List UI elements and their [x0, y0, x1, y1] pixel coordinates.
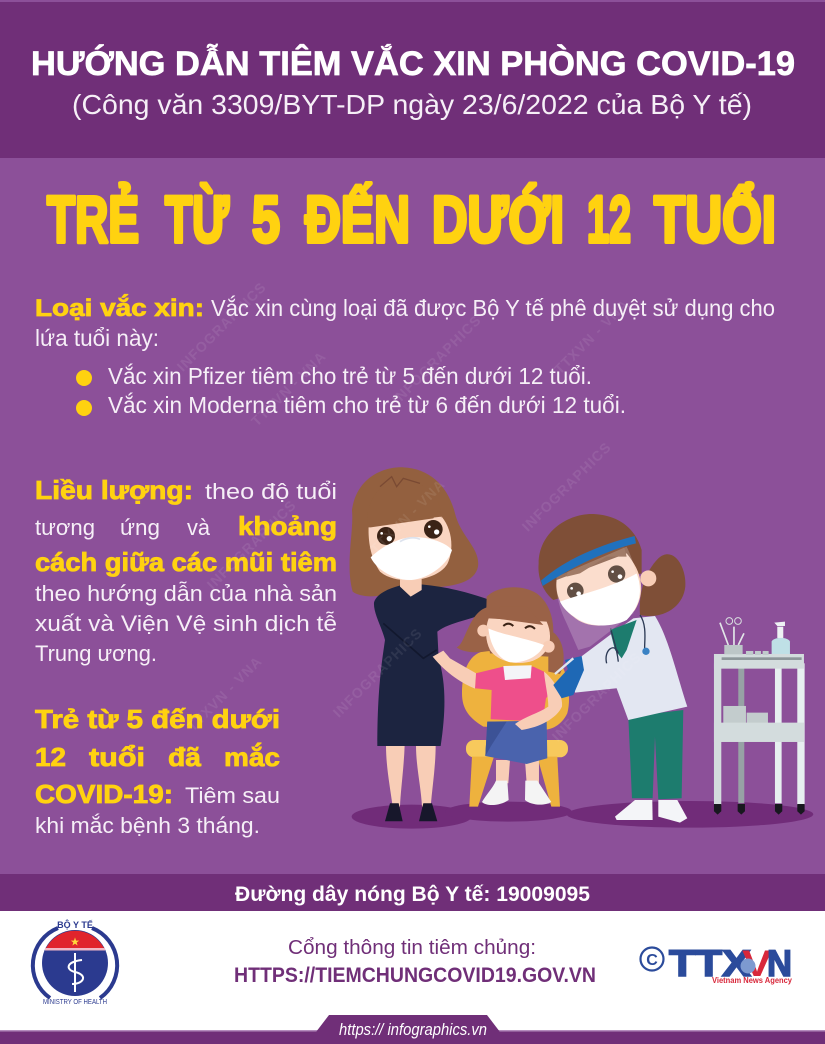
- text block: dosage: Liều lượng:: [35, 475, 193, 505]
- text block: vaccine type: Vắc xin cùng loại đã được Bộ Y tế phê duyệt sử dụng cho: [211, 295, 775, 321]
- text block: vaccine type: lứa tuổi này:: [35, 325, 159, 351]
- hotline band: [0, 874, 825, 911]
- text block: vaccine type: Loại vắc xin:: [35, 294, 204, 322]
- text block: dosage: theo độ tuổi: [205, 479, 337, 504]
- logo: Ministry of Health: ★: [70, 937, 80, 947]
- text block: dosage: và: [187, 515, 210, 540]
- white footer panel: [0, 911, 825, 1031]
- hotline band: Đường dây nóng Bộ Y tế: 19009095: [235, 883, 590, 906]
- header band: [0, 2, 825, 158]
- watermarks: TTXVN - VNA: [367, 476, 448, 557]
- text block: vaccine type: [35, 294, 775, 418]
- portal text: Cổng thông tin tiêm chủng:: [288, 937, 536, 959]
- text block: children who had COVID-19: tuổi: [89, 742, 145, 772]
- watermarks: INFOGRAPHICS: [389, 312, 484, 407]
- watermarks: INFOGRAPHICS: [549, 649, 644, 744]
- text block: dosage: xuất và Viện Vệ sinh dịch tễ: [35, 611, 337, 636]
- bullet: Moderna: Vắc xin Moderna tiêm cho trẻ từ 6 đến dưới 12 tuổi.: [108, 392, 626, 418]
- text block: dosage: tương: [35, 515, 95, 540]
- ground shadows: [352, 801, 813, 829]
- watermarks: INFOGRAPHICS: [204, 497, 299, 592]
- medical cart: [714, 618, 805, 815]
- main heading: age group: DƯỚI: [432, 182, 564, 256]
- logo: TTXVN: N: [767, 943, 792, 984]
- pigtails: [457, 607, 493, 652]
- watermarks: INFOGRAPHICS: [330, 625, 425, 720]
- main heading: age group: TRẺ: [47, 182, 139, 256]
- watermarks: TTXVN - VNA: [184, 653, 265, 734]
- text block: dosage: cách giữa các mũi tiêm: [35, 547, 337, 577]
- watermarks: [174, 279, 644, 744]
- logo: TTXVN: Vietnam News Agency: [712, 975, 792, 985]
- text block: dosage: khoảng: [238, 511, 337, 541]
- text block: children who had COVID-19: mắc: [224, 742, 280, 772]
- text block: children who had COVID-19: [35, 704, 280, 838]
- watermarks: TTXVN - VNA: [551, 296, 632, 377]
- watermarks: TTXVN - VNA: [248, 348, 329, 429]
- bottom band with url tab: https:// infographics.vn: [339, 1021, 487, 1039]
- text block: children who had COVID-19: COVID-19:: [35, 779, 173, 809]
- logo: TTXVN: V: [742, 943, 772, 984]
- portal text: [234, 937, 596, 987]
- main heading: age group: 12: [587, 182, 631, 256]
- logo: TTXVN: [640, 943, 792, 985]
- logo: Ministry of Health: BỘ Y TẾ: [57, 919, 93, 930]
- text block: dosage: Trung ương.: [35, 641, 157, 666]
- logo: Ministry of Health: [33, 919, 117, 1006]
- main heading: age group: TỪ: [165, 182, 229, 256]
- text block: children who had COVID-19: khi mắc bệnh 3 tháng.: [35, 813, 260, 838]
- face shield: [556, 547, 638, 650]
- girl: [433, 587, 564, 805]
- text block: dosage: [35, 475, 337, 666]
- subtitle: (Công văn 3309/BYT-DP ngày 23/6/2022 của Bộ Y tế): [72, 89, 752, 120]
- mother: [350, 467, 490, 821]
- bullet: Pfizer: Vắc xin Pfizer tiêm cho trẻ từ 5 đến dưới 12 tuổi.: [108, 363, 592, 389]
- text block: dosage: theo hướng dẫn của nhà sản: [35, 581, 337, 606]
- main heading: age group: 5: [252, 182, 280, 256]
- main heading: age group: TUỔI: [654, 182, 776, 256]
- portal text: HTTPS://TIEMCHUNGCOVID19.GOV.VN: [234, 964, 596, 987]
- text block: children who had COVID-19: Trẻ từ 5 đến dưới: [35, 704, 280, 734]
- illustration: vaccination scene: [350, 467, 813, 829]
- logo: Ministry of Health: MINISTRY OF HEALTH: [43, 997, 107, 1006]
- title: HƯỚNG DẪN TIÊM VẮC XIN PHÒNG COVID-19: [31, 45, 795, 83]
- main heading: age group: [47, 182, 776, 256]
- text block: children who had COVID-19: 12: [35, 742, 66, 772]
- logo: TTXVN: TTX: [669, 943, 751, 984]
- chair: [462, 651, 569, 807]
- nurse: [538, 514, 687, 823]
- main heading: age group: ĐẾN: [305, 182, 410, 256]
- text block: children who had COVID-19: đã: [168, 742, 202, 772]
- bottom band with url tab: [0, 1015, 825, 1044]
- watermarks: INFOGRAPHICS: [519, 439, 614, 534]
- watermarks: INFOGRAPHICS: [174, 279, 269, 374]
- logo: TTXVN: C: [646, 952, 658, 969]
- text block: children who had COVID-19: Tiêm sau: [185, 783, 280, 808]
- text block: dosage: ứng: [120, 515, 160, 540]
